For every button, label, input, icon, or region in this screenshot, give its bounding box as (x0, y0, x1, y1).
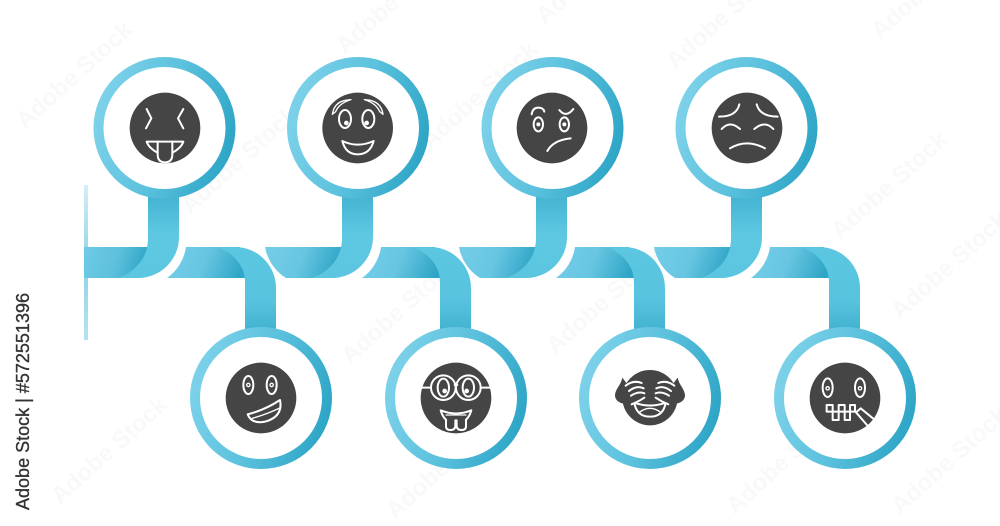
ring 6 (390, 332, 522, 464)
background watermark: Adobe Stock (381, 406, 509, 524)
icon: tongue out face (130, 93, 200, 163)
stock credit text: Adobe Stock | #572551396 (13, 293, 33, 510)
ring 2 (292, 62, 424, 194)
icon: confused face (517, 93, 587, 163)
icon: sad tired face (712, 93, 782, 163)
connector 3 (459, 190, 665, 335)
background watermark: Adobe Stock (541, 241, 669, 359)
ring 5 (195, 332, 327, 464)
background watermark: Adobe Stock (416, 36, 544, 154)
ring 1 (98, 62, 230, 194)
icon: zipped mouth face (810, 363, 880, 433)
background watermark: Adobe Stock (336, 251, 464, 369)
ring 8 (779, 332, 911, 464)
background watermark: Adobe Stock (46, 391, 174, 509)
background watermark: Adobe Stock (721, 401, 849, 519)
connector 1 (84, 190, 276, 335)
background watermark: Adobe Stock (11, 16, 139, 134)
ring 4 (680, 62, 812, 194)
icon: nerd face with glasses (421, 363, 492, 433)
background watermark: Adobe Stock (176, 101, 304, 219)
ring 3 (486, 62, 618, 194)
icon: laughing face (226, 363, 296, 433)
left start line (84, 185, 88, 340)
ring 7 (584, 332, 716, 464)
connector 4 (654, 190, 860, 335)
connector 2 (265, 190, 471, 335)
icon: surprised smiling face (322, 93, 393, 163)
icon: face covering eyes with hands (615, 370, 685, 425)
background watermark: Adobe Stock (826, 126, 954, 244)
